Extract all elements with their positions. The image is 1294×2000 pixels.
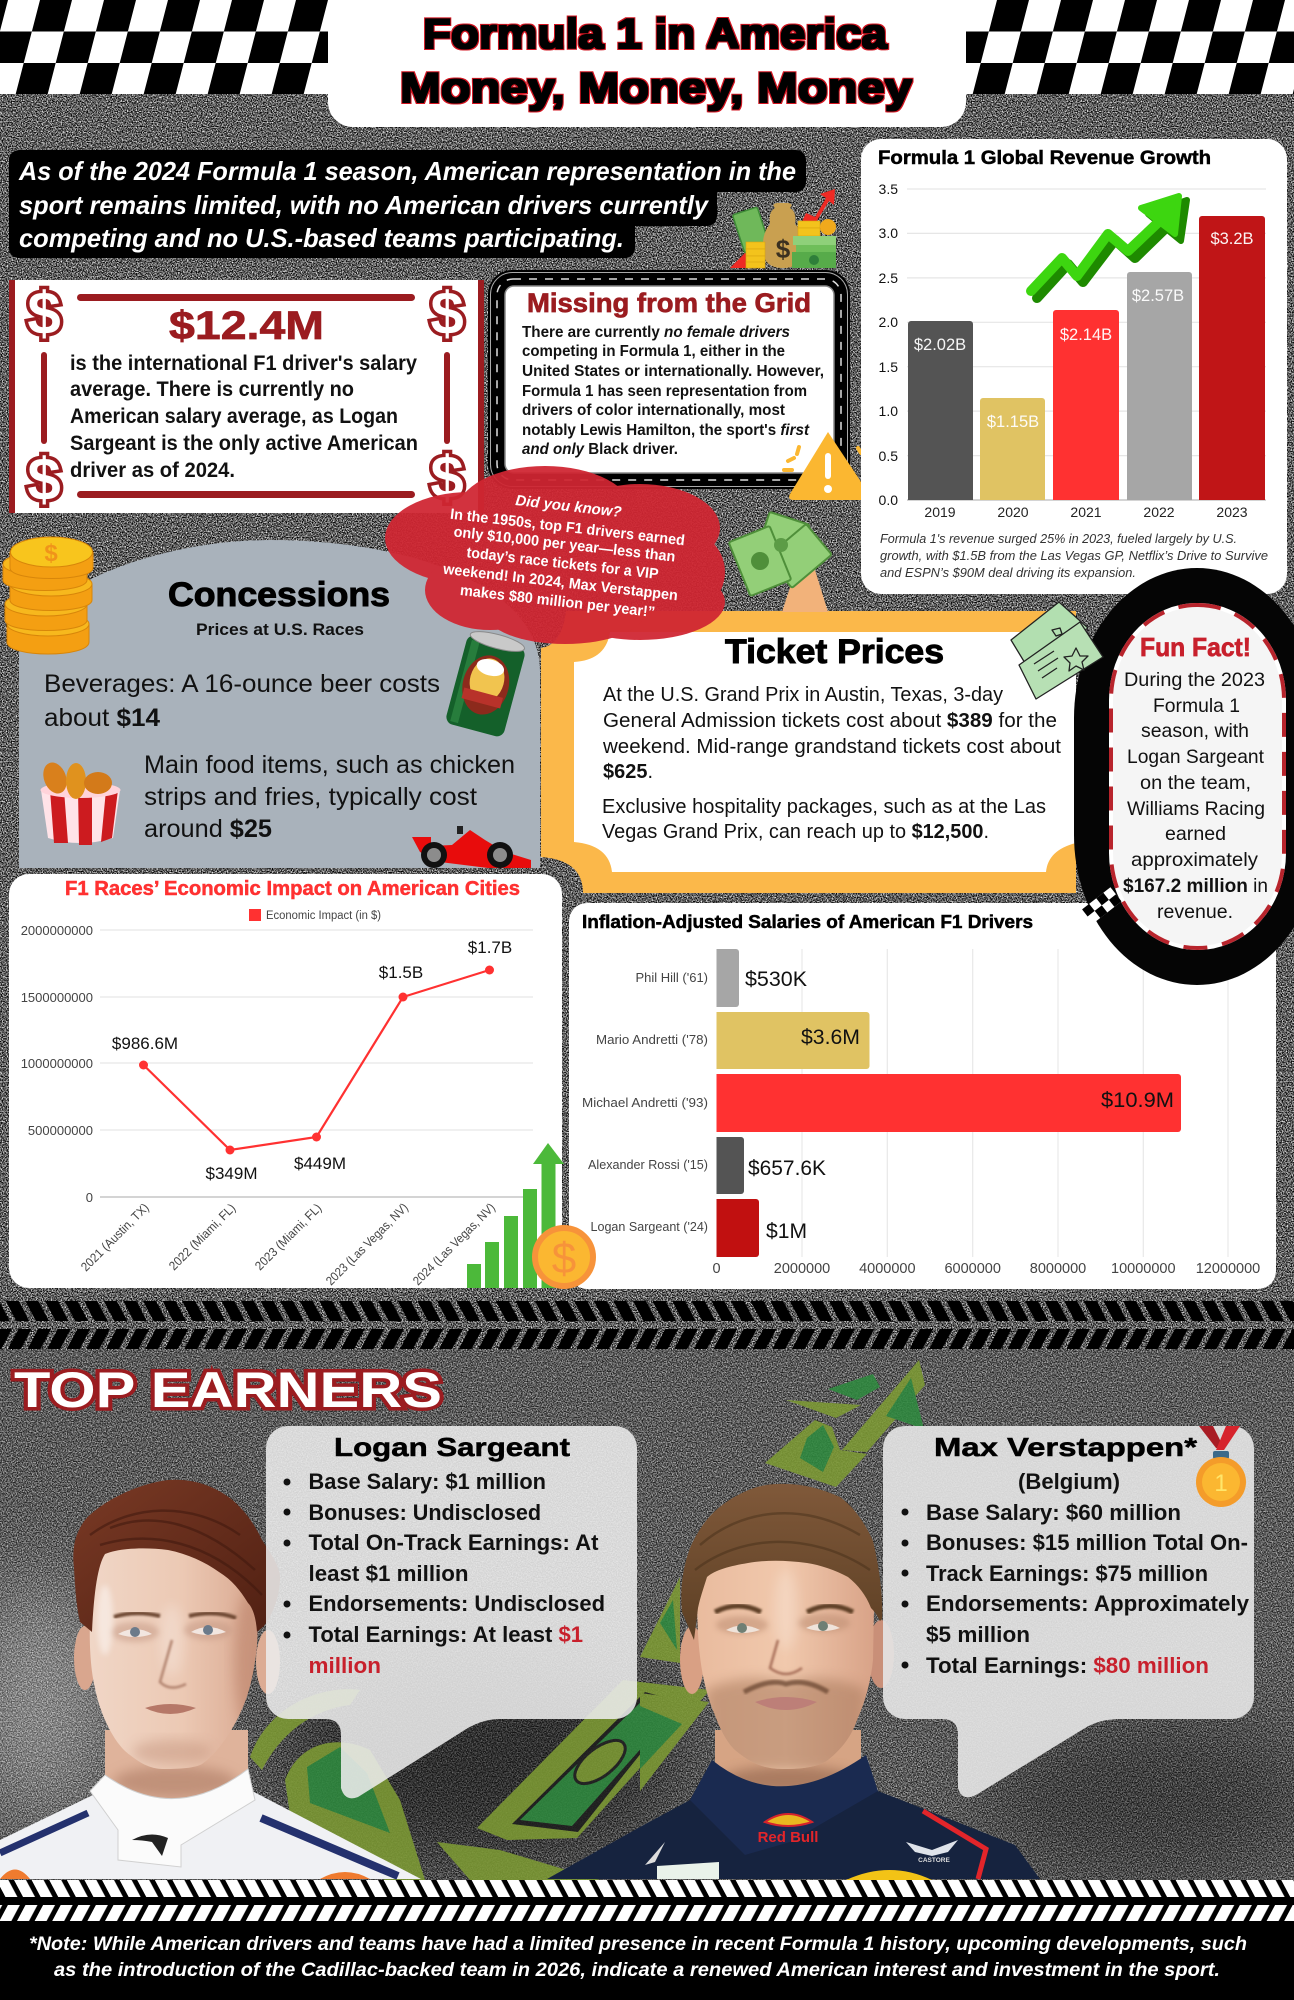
fun fact text: $167.2 million in [1123, 875, 1268, 897]
year labels: 2022 [1143, 504, 1175, 520]
chart title: Formula 1 Global Revenue Growth [878, 148, 1211, 169]
body copy: notably Lewis Hamilton, the sport's first [522, 422, 810, 439]
grid and y axis [879, 181, 1266, 508]
title: Money, Money, Money [400, 64, 913, 111]
callout: did you know cloud: makes $80 million per year!” [459, 582, 656, 621]
driver labels: Logan Sargeant ('24) [590, 1219, 708, 1234]
speech bubble: Logan Sargeant [266, 1426, 637, 1798]
grid and y axis: 0.5 [879, 448, 898, 464]
earnings list: Endorsements: Approximately [926, 1591, 1250, 1616]
grid and y axis: 1.5 [879, 359, 898, 375]
name: Logan Sargeant [334, 1432, 570, 1462]
salary description [70, 352, 418, 482]
earnings list: Base Salary: $60 million [926, 1500, 1181, 1525]
x axis labels: 2023 (Las Vegas, NV) [323, 1200, 411, 1288]
grid [802, 949, 1228, 1257]
caption: and ESPN’s $90M deal driving its expansion. [880, 565, 1136, 580]
caption: Formula 1's revenue surged 25% in 2023, fueled largely by U.S. [880, 531, 1237, 546]
collar [90, 1769, 255, 1867]
intro statement: As of the 2024 Formula 1 season, American representation in the [18, 156, 796, 186]
earnings list: Base Salary: $1 million [308, 1469, 546, 1494]
value labels: $2.02B [914, 336, 966, 354]
year labels: 2020 [997, 504, 1029, 520]
driver labels: Alexander Rossi ('15) [588, 1157, 708, 1172]
note text: *Note: While American drivers and teams have had a limited presence in recent Formula 1 history, upcoming developments, such [29, 1933, 1247, 1955]
value labels: $3.2B [1210, 230, 1254, 248]
decorative frame with dollar icons: $ [430, 280, 464, 347]
salary description: Sargeant is the only active American [70, 432, 418, 455]
portrait: Max Verstappen [547, 1484, 1040, 1880]
paragraph one: At the U.S. Grand Prix in Austin, Texas, 3-day [603, 684, 1003, 706]
x axis labels: 2000000 [774, 1261, 830, 1277]
legend: Economic Impact (in $) [266, 910, 381, 922]
Castore wing mark [906, 1840, 958, 1856]
x axis labels: 8000000 [1030, 1261, 1086, 1277]
icon: green rising bars with coin: $ [552, 1234, 576, 1283]
salary description: is the international F1 driver's salary [70, 352, 417, 375]
grid and y axis: 2.5 [879, 270, 898, 286]
note text: as the introduction of the Cadillac-backed team in 2026, indicate a renewed American interest and investment in the sport. [54, 1959, 1220, 1981]
heading: Ticket Prices [725, 633, 944, 671]
portrait: Logan Sargeant [0, 1480, 421, 1879]
callout: did you know cloud: only $10,000 per year—less than [453, 523, 676, 566]
body copy [522, 324, 824, 458]
icon: money bag with cash and rising arrow [730, 189, 836, 268]
driver labels: Michael Andretti ('93) [582, 1095, 708, 1110]
neck [105, 1730, 248, 1840]
facial features [715, 1606, 853, 1710]
panel: fun fact race track [1074, 568, 1294, 985]
icon: money bag with cash and rising arrow: $ [776, 234, 791, 264]
data line [139, 966, 494, 1154]
caption [880, 531, 1268, 580]
face shading and stubble [705, 1570, 866, 1770]
value labels: $2.14B [1060, 326, 1112, 344]
intro statement: sport remains limited, with no American drivers currently [19, 190, 709, 220]
value labels: $10.9M [1101, 1089, 1174, 1112]
chart: economic impact line chart [9, 874, 562, 1288]
bars [716, 949, 1181, 1257]
earnings list: Endorsements: Undisclosed [308, 1591, 605, 1616]
callout: did you know cloud: In the 1950s, top F1 drivers earned [449, 506, 686, 549]
chart title: Inflation-Adjusted Salaries of American F1 Drivers [582, 912, 1033, 932]
data labels: $1.7B [468, 938, 512, 957]
salary description: average. There is currently no [70, 378, 354, 401]
decorative frame with dollar icons: $ [430, 444, 464, 511]
paragraph two: Exclusive hospitality packages, such as at the Las [602, 796, 1046, 818]
food text [144, 751, 515, 843]
x axis labels [712, 1261, 1260, 1277]
decorative frame with dollar icons: $ [27, 446, 61, 513]
body copy: United States or internationally. However, [522, 363, 824, 380]
x axis labels [78, 1200, 498, 1288]
heading: Missing from the Grid [527, 288, 811, 318]
x axis labels: 12000000 [1196, 1261, 1260, 1277]
year labels [924, 504, 1248, 520]
title: Formula 1 in America [423, 10, 888, 57]
grid and y axis: 1.0 [879, 403, 898, 419]
bars [908, 216, 1265, 500]
collar [690, 1755, 878, 1855]
suit [547, 1791, 1040, 1879]
food text: around $25 [144, 815, 272, 843]
fun fact text: Logan Sargeant [1127, 746, 1265, 768]
Red Bull emblem [765, 1814, 812, 1826]
icon: gold medal: 1 [1214, 1470, 1228, 1497]
earnings list: $5 million [926, 1622, 1030, 1647]
body copy: competing in Formula 1, either in the [522, 343, 785, 360]
heading: top earners: TOP EARNERS [14, 1362, 442, 1418]
food text: strips and fries, typically cost [144, 783, 477, 811]
Castore logo: CASTORE [918, 1857, 950, 1864]
grid and y axis: 2.0 [879, 314, 898, 330]
chart title: F1 Races’ Economic Impact on American Cities [65, 878, 520, 900]
fun fact text [1123, 669, 1268, 923]
hair [681, 1484, 882, 1640]
grid and y axis: 0 [86, 1190, 93, 1205]
paragraph two [602, 796, 1046, 843]
heading: Fun Fact! [1140, 632, 1251, 662]
country: (Belgium) [1018, 1469, 1120, 1494]
panel: missing from the grid [488, 270, 850, 489]
header: left checkered flag [0, 0, 328, 94]
value labels: $2.57B [1132, 287, 1184, 305]
salary description: American salary average, as Logan [70, 405, 398, 428]
intro statement: competing and no U.S.-based teams participating. [19, 223, 624, 253]
earnings list: least $1 million [308, 1561, 468, 1586]
fun fact text: on the team, [1140, 772, 1251, 794]
icon: gold medal [1196, 1426, 1246, 1507]
icon: green tickets [1011, 602, 1103, 699]
body copy: drivers of color internationally, most [522, 402, 785, 419]
earnings list: Bonuses: $15 million Total On- [926, 1530, 1248, 1555]
driver labels [582, 970, 708, 1234]
earnings list: Bonuses: Undisclosed [308, 1500, 541, 1525]
fun fact text: season, with [1141, 720, 1249, 742]
value labels: $1M [766, 1220, 807, 1243]
value labels: $530K [745, 968, 807, 991]
x axis labels: 2024 (Las Vegas, NV) [410, 1200, 498, 1288]
food text: Main food items, such as chicken [144, 751, 515, 779]
name: Max Verstappen* [934, 1432, 1198, 1462]
icon: green growth arrow [1031, 196, 1187, 298]
decorative frame with dollar icons: $ [27, 280, 61, 347]
footer note band [0, 1880, 1294, 2000]
callout: did you know cloud: Did you know? [515, 492, 622, 521]
hair [73, 1480, 280, 1632]
checker start line [1082, 887, 1122, 924]
icon: chicken bucket [39, 759, 121, 845]
earnings list: Total On-Track Earnings: At [308, 1530, 599, 1555]
year labels: 2021 [1070, 504, 1102, 520]
value labels: $3.6M [801, 1026, 860, 1049]
earnings list: million [308, 1653, 381, 1678]
beverages text: Beverages: A 16-ounce beer costs [44, 670, 440, 698]
chart: formula 1 global revenue growth [861, 139, 1287, 594]
face [697, 1550, 875, 1769]
fun fact text: During the 2023 [1124, 669, 1265, 691]
body copy: There are currently no female drivers [522, 324, 790, 341]
driver labels: Phil Hill ('61) [636, 970, 708, 985]
icon: hand holding cash [729, 512, 832, 612]
grid and y axis: 2000000000 [21, 923, 93, 938]
paragraph one: $625. [603, 761, 653, 783]
icon: red F1 car [412, 826, 531, 868]
paragraph one: General Admission tickets cost about $389 for the [603, 710, 1057, 732]
data labels [112, 938, 512, 1183]
heading: Concessions [168, 576, 390, 614]
grid and y axis: 3.0 [879, 225, 898, 241]
callout: did you know cloud: weekend! In 2024, Max Verstappen [441, 561, 679, 604]
x axis labels: 4000000 [859, 1261, 916, 1277]
paragraph two: Vegas Grand Prix, can reach up to $12,500. [602, 821, 989, 843]
note text [29, 1933, 1247, 1981]
fun fact text: earned [1165, 823, 1226, 845]
icon: coin stack: $ [44, 540, 58, 567]
facial features [114, 1613, 236, 1714]
hair strands [90, 1511, 262, 1595]
top bill segment [765, 1360, 925, 1487]
icon: beer can [445, 627, 528, 738]
title [328, 0, 966, 127]
panel: average salary [9, 280, 484, 513]
grid and y axis: 1500000000 [21, 990, 93, 1005]
beverages text: about $14 [44, 704, 160, 732]
value labels: $1.15B [987, 413, 1039, 431]
value labels: $657.6K [748, 1157, 826, 1180]
hair strands [695, 1513, 870, 1570]
panel: concessions [19, 540, 540, 868]
background: money bill arrow [250, 1360, 925, 1880]
suit [0, 1791, 421, 1879]
earnings list: Track Earnings: $75 million [926, 1561, 1208, 1586]
lower bill segment [437, 1680, 710, 1880]
beverages text [44, 670, 440, 732]
caption: growth, with $1.5B from the Las Vegas GP, Netflix’s Drive to Survive [880, 548, 1268, 563]
fun fact text: Williams Racing [1127, 798, 1265, 820]
face shading [97, 1585, 266, 1764]
x axis labels: 0 [712, 1261, 721, 1277]
face [90, 1540, 258, 1769]
panel: ticket prices [541, 611, 1076, 893]
salary description: driver as of 2024. [70, 459, 235, 482]
big number: $12.4M [169, 304, 324, 348]
driver labels: Mario Andretti ('78) [596, 1032, 708, 1047]
body copy: and only Black driver. [522, 441, 678, 458]
grid and y axis [21, 923, 533, 1205]
neck [715, 1730, 861, 1808]
earnings list [902, 1500, 1250, 1678]
right bill segments behind Max [640, 1577, 709, 1791]
callout: did you know cloud [385, 466, 725, 644]
body copy: Formula 1 has seen representation from [522, 383, 807, 400]
value labels [745, 968, 1174, 1243]
fun fact text: Formula 1 [1153, 695, 1240, 717]
x axis labels: 10000000 [1111, 1261, 1176, 1277]
data labels: $349M [206, 1164, 257, 1183]
earnings list: Total Earnings: $80 million [926, 1653, 1209, 1678]
data labels: $449M [294, 1154, 346, 1173]
x axis labels: 2021 (Austin, TX) [78, 1201, 152, 1274]
divider: upper tyre track [0, 1301, 1294, 1349]
year labels: 2019 [924, 504, 956, 520]
ears [680, 1626, 704, 1694]
grid and y axis: 500000000 [28, 1123, 93, 1138]
puma logo mark [132, 1834, 168, 1856]
intro statement [9, 150, 806, 258]
value labels [914, 230, 1254, 431]
fun fact text: revenue. [1157, 901, 1233, 923]
decorative frame with dollar icons [27, 280, 464, 513]
x axis labels: 2022 (Miami, FL) [166, 1201, 238, 1273]
paragraph one [602, 684, 1061, 783]
icon: coin stack [3, 537, 93, 654]
data labels: $1.5B [379, 963, 423, 982]
year labels: 2023 [1216, 504, 1248, 520]
white tyre track [0, 1880, 1294, 1921]
chart: inflation-adjusted salaries bar chart [569, 903, 1276, 1289]
earnings list [284, 1469, 605, 1678]
speech bubble: Max Verstappen [883, 1426, 1254, 1797]
icon: warning triangle [784, 432, 875, 500]
grid and y axis: 0.0 [879, 492, 898, 508]
grid and y axis: 1000000000 [21, 1056, 93, 1071]
icon: green rising bars with coin [467, 1143, 593, 1288]
left bill loop [250, 1689, 425, 1880]
Red Bull logo: Red Bull [758, 1829, 818, 1846]
grid and y axis: 3.5 [879, 181, 898, 197]
ears [74, 1626, 96, 1690]
callout: did you know cloud: today’s race tickets for a VIP [466, 544, 659, 583]
earnings list: Total Earnings: At least $1 [308, 1622, 583, 1647]
x axis labels: 6000000 [944, 1261, 1001, 1277]
subheading: Prices at U.S. Races [196, 620, 364, 639]
paragraph one: weekend. Mid-range grandstand tickets cost about [602, 736, 1061, 758]
data labels: $986.6M [112, 1034, 178, 1053]
fun fact text: approximately [1131, 849, 1258, 871]
header: right checkered flag [966, 0, 1294, 94]
x axis labels: 2023 (Miami, FL) [252, 1201, 324, 1273]
